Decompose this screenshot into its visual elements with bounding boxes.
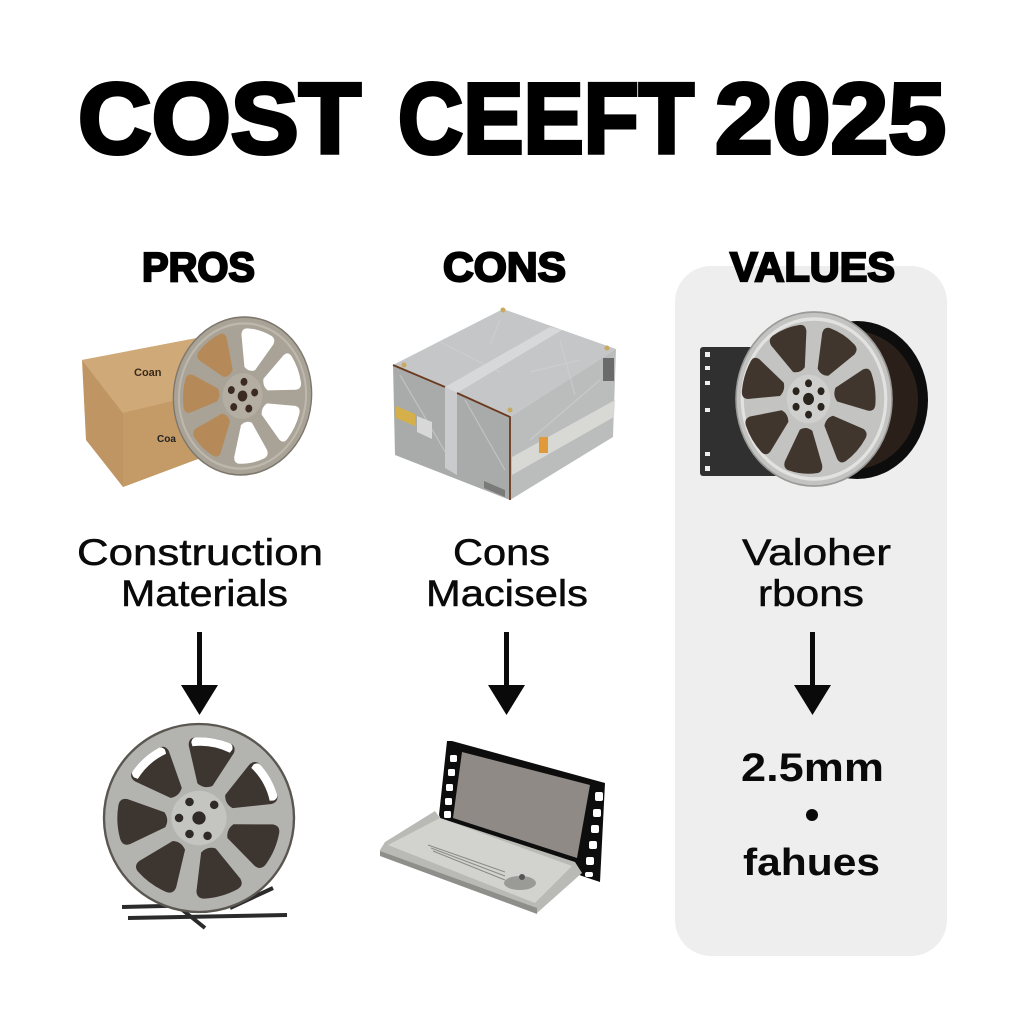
heading: values: VALUES	[730, 244, 895, 290]
icon: wrapped grey box	[392, 308, 616, 500]
text: valoher rbons: Valoher	[742, 532, 891, 573]
arrow: cons	[488, 632, 525, 715]
heading: cons: CONS	[443, 244, 566, 290]
text: construction materials	[77, 532, 323, 614]
value: 2.5mm: 2.5mm	[741, 746, 884, 790]
icon: cardboard box with film reel: Coa	[157, 434, 176, 445]
text: cons macisels: Cons	[453, 532, 550, 573]
bullet dot	[806, 809, 818, 821]
heading: pros: PROS	[142, 244, 255, 290]
arrow: pros	[181, 632, 218, 715]
text: construction materials: Materials	[121, 573, 288, 614]
text: valoher rbons: rbons	[758, 573, 864, 614]
text: cons macisels: Macisels	[426, 573, 588, 614]
arrow: values	[794, 632, 831, 715]
icon: film reel on stand	[102, 722, 296, 930]
icon: film strip case	[380, 741, 605, 914]
panel: values background	[675, 266, 947, 956]
text: construction materials: Construction	[77, 532, 323, 573]
title	[78, 63, 946, 175]
title: CEEFT	[398, 63, 694, 175]
text: valoher rbons	[742, 532, 891, 614]
icon: cardboard box with film reel	[82, 316, 312, 487]
title: 2025	[715, 63, 946, 175]
title: COST	[78, 63, 361, 175]
icon: film reel with film strip	[700, 311, 928, 487]
icon: cardboard box with film reel: Coan	[134, 367, 162, 379]
text: cons macisels	[426, 532, 588, 614]
value: fahues: fahues	[743, 842, 880, 884]
